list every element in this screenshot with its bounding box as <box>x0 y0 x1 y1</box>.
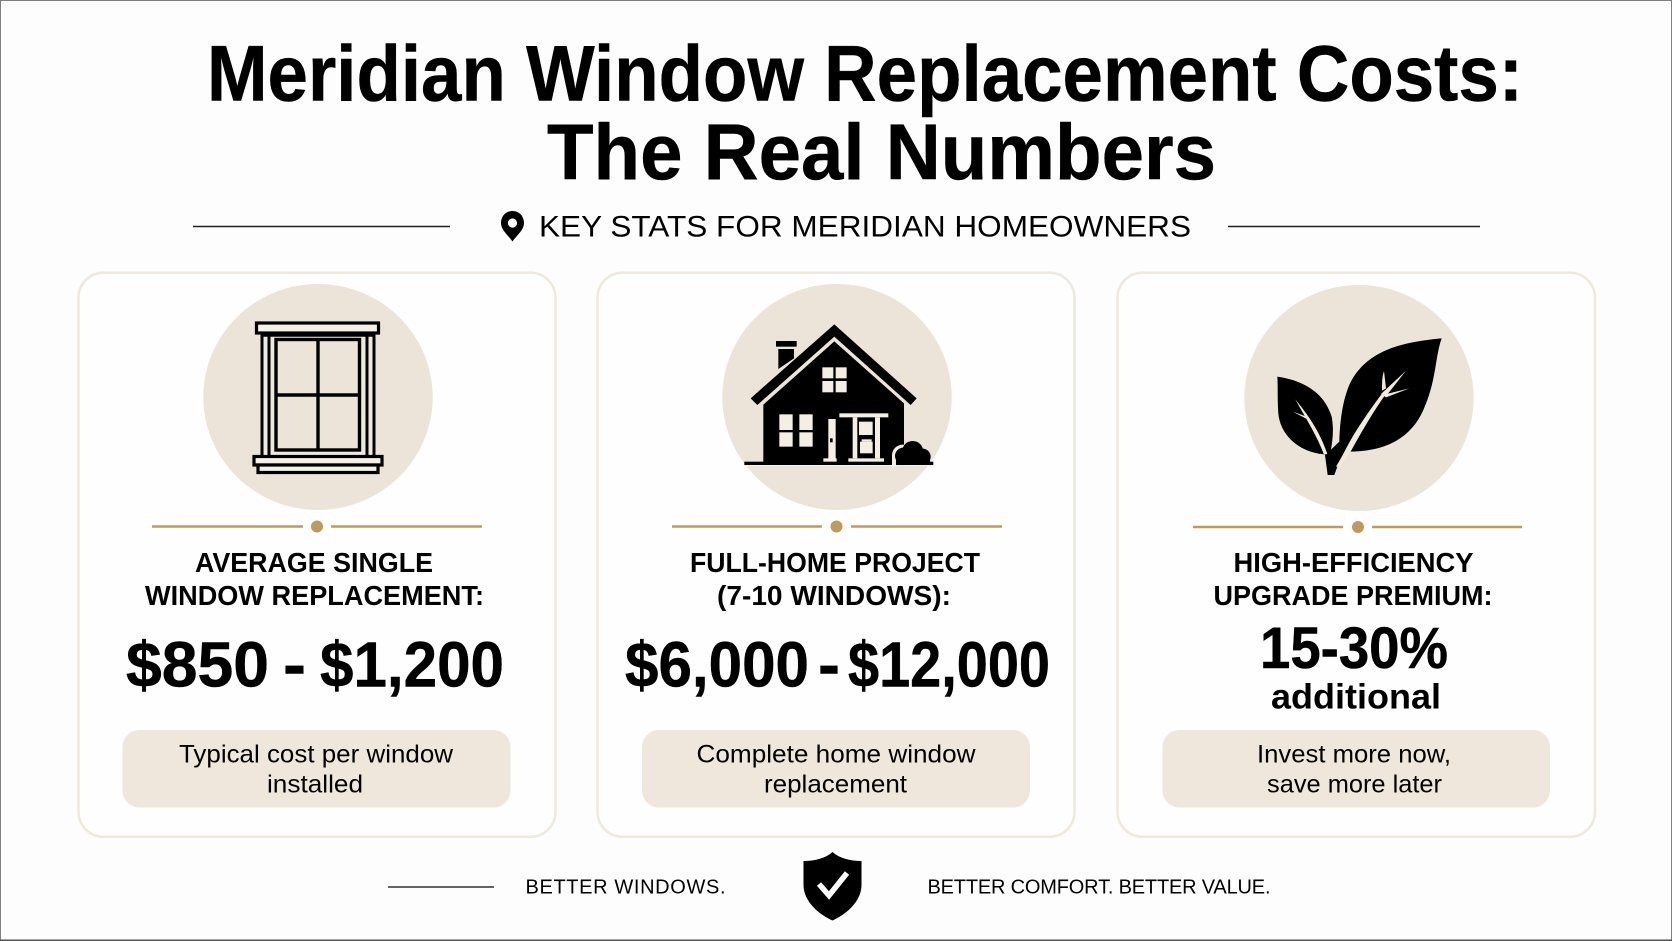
note pill <box>122 730 510 808</box>
price: $1,200 <box>320 628 504 700</box>
divider <box>152 520 482 532</box>
heading: (7-10 WINDOWS): <box>717 580 951 611</box>
heading <box>1214 547 1492 611</box>
price <box>126 628 504 700</box>
price: - <box>818 628 840 700</box>
note pill: Typical cost per window <box>179 740 454 768</box>
note pill: Complete home window <box>696 740 976 768</box>
icon: shield with check <box>804 852 862 920</box>
icon: location pin <box>501 211 524 242</box>
icon: house in circle <box>722 284 952 510</box>
note pill: installed <box>267 770 363 798</box>
subtitle row <box>193 210 1480 244</box>
divider <box>1193 521 1522 533</box>
panel: average single window replacement <box>78 273 556 837</box>
heading: WINDOW REPLACEMENT: <box>145 580 484 611</box>
divider <box>672 520 1002 532</box>
heading <box>690 547 980 611</box>
panel: full-home project <box>598 273 1074 837</box>
price <box>625 628 1050 700</box>
footer tagline <box>388 852 1270 920</box>
price: $6,000 <box>625 628 809 700</box>
title: Meridian Window Replacement Costs: <box>207 28 1523 118</box>
title <box>207 28 1523 196</box>
heading: FULL-HOME PROJECT <box>690 547 980 578</box>
price: $12,000 <box>848 628 1050 700</box>
icon: window in circle <box>203 284 433 510</box>
heading <box>145 547 484 611</box>
note pill: Invest more now, <box>1257 740 1451 768</box>
subtitle text: KEY STATS FOR MERIDIAN HOMEOWNERS <box>539 210 1191 244</box>
additional label: additional <box>1271 677 1441 716</box>
note pill: replacement <box>764 770 907 798</box>
price: $850 <box>126 628 269 700</box>
note pill: save more later <box>1267 770 1442 798</box>
price: - <box>283 628 306 700</box>
note pill <box>642 730 1030 808</box>
heading: HIGH-EFFICIENCY <box>1234 547 1474 578</box>
percentage: 15-30% <box>1260 616 1448 681</box>
footer text right: BETTER COMFORT. BETTER VALUE. <box>928 876 1270 898</box>
footer text left: BETTER WINDOWS. <box>526 876 726 898</box>
heading: AVERAGE SINGLE <box>195 547 433 578</box>
panel: high-efficiency upgrade premium <box>1118 273 1595 837</box>
heading: UPGRADE PREMIUM: <box>1214 580 1492 611</box>
note pill <box>1162 730 1550 808</box>
title: The Real Numbers <box>547 107 1216 196</box>
icon: leaves in circle <box>1244 285 1474 511</box>
